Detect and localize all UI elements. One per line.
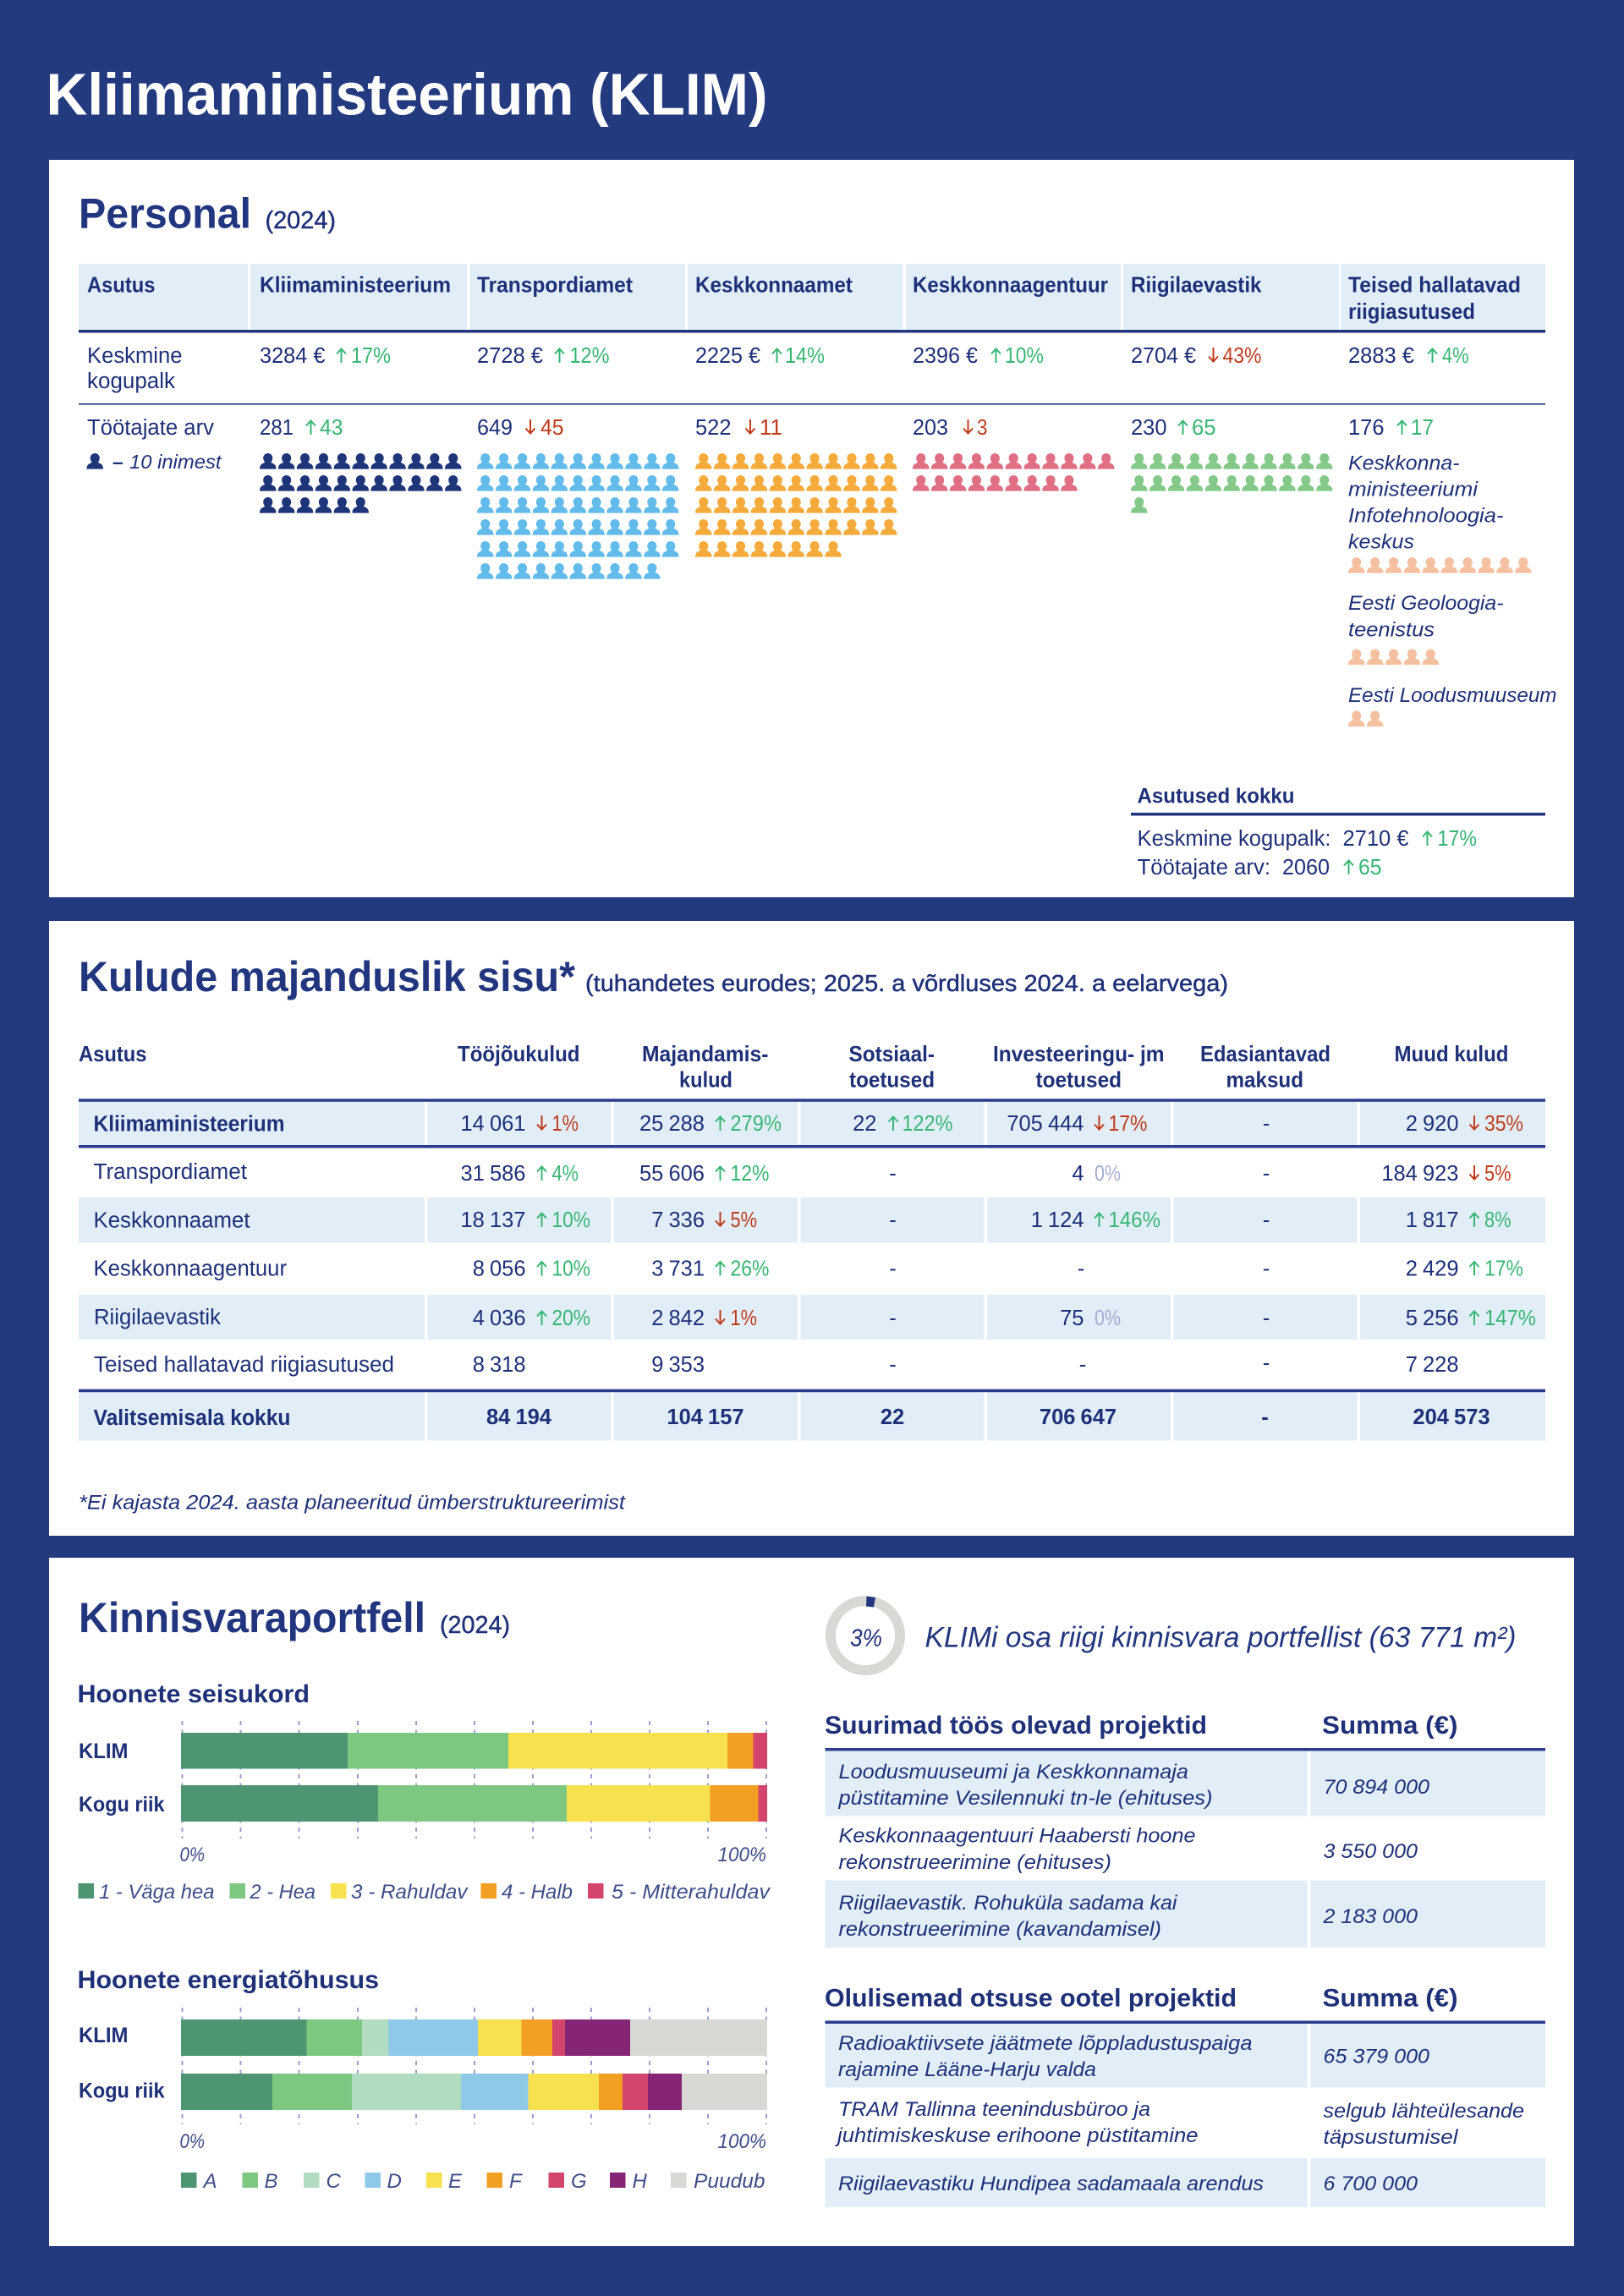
row: Kliimaministeerium: -	[1263, 1112, 1270, 1136]
row: Kliimaministeerium: 1%	[551, 1112, 579, 1136]
legend: energy: C	[326, 2170, 342, 2193]
chart: Hoonete energiatõhusus: 0%	[179, 2130, 205, 2153]
row: Valitsemisala kokku: 204 573	[1413, 1406, 1490, 1429]
sub-agencies list: teenistus	[1348, 619, 1435, 641]
row: staff count	[87, 416, 1434, 440]
table header: staff: Riigilaevastik	[1131, 272, 1262, 298]
row: Keskkonnaagentuur: 8 056	[473, 1257, 526, 1280]
legend: energy: G	[571, 2170, 587, 2193]
chart: Hoonete energiatõhusus: KLIM	[79, 2024, 129, 2047]
table header: costs: Tööjõukulud	[458, 1041, 580, 1066]
table header: staff: Kliimaministeerium	[260, 272, 451, 298]
row: Keskkonnaamet: -	[1263, 1208, 1270, 1232]
table: Suurimad töös olevad projektid: 3 550 000	[1323, 1840, 1418, 1863]
summary: Asutused kokku: Keskmine kogupalk:	[1137, 827, 1331, 851]
table: Olulisemad otsuse ootel projektid: rajamine Lääne-Harju valda	[838, 2058, 1096, 2081]
chart: Hoonete seisukord: Kogu riik	[79, 1793, 165, 1817]
panel: Personal	[49, 160, 1574, 897]
row: Keskkonnaagentuur: 17%	[1484, 1257, 1523, 1280]
row: Kliimaministeerium: Kliimaministeerium	[93, 1113, 284, 1137]
row: Valitsemisala kokku: 22	[881, 1406, 904, 1429]
table: Suurimad töös olevad projektid	[825, 1712, 1545, 1948]
summary: Asutused kokku: 65	[1358, 856, 1382, 879]
table header: costs: Investeeringu- jm	[993, 1041, 1164, 1066]
row: Kliimaministeerium: 279%	[731, 1112, 782, 1136]
row: staff count: 230	[1131, 416, 1167, 440]
row: Riigilaevastik	[94, 1306, 1536, 1330]
row: staff count: 522	[695, 416, 731, 440]
sub-agencies list: Eesti Loodusmuuseum	[1348, 684, 1556, 707]
chart: Hoonete energiatõhusus: Hoonete energiatõhusus	[78, 1966, 379, 1994]
row: average salary: 3284 €	[260, 344, 325, 368]
bar: Kogu riik condition	[181, 1785, 767, 1822]
table: Olulisemad otsuse ootel projektid	[825, 1984, 1545, 2207]
row: staff count: Töötajate arv	[87, 416, 214, 440]
bar: Kogu riik energy	[181, 2074, 767, 2110]
sub-agencies list: Infotehnoloogia-	[1348, 504, 1504, 528]
sub-agencies list: Eesti Geoloogia-	[1348, 592, 1504, 615]
heading: Personal: (2024)	[266, 207, 336, 234]
row: Teised hallatavad riigiasutused: -	[889, 1353, 897, 1377]
row: Transpordiamet: 55 606	[639, 1162, 705, 1186]
panel: Kinnisvaraportfell	[49, 1558, 1574, 2246]
row: Teised hallatavad riigiasutused: 9 353	[651, 1353, 705, 1377]
row: Kliimaministeerium	[93, 1112, 1523, 1137]
row: Teised hallatavad riigiasutused: -	[1079, 1353, 1086, 1377]
legend: condition: 3 - Rahuldav	[351, 1881, 469, 1904]
row: average salary: kogupalk	[87, 370, 175, 393]
summary: Asutused kokku	[1131, 785, 1545, 879]
row: Valitsemisala kokku: Valitsemisala kokku	[93, 1406, 291, 1430]
row: Keskkonnaagentuur: -	[1263, 1257, 1270, 1280]
icon legend: one person equals ten people	[86, 451, 222, 473]
heading: Personal: Personal	[79, 189, 251, 237]
row: Keskkonnaamet: 146%	[1108, 1208, 1160, 1232]
panel: Kulude majanduslik sisu	[49, 921, 1574, 1536]
pictogram: Kliimaministeerium	[260, 453, 462, 513]
row: average salary: 17%	[351, 344, 391, 368]
title: Kliimaministeerium (KLIM)	[46, 61, 768, 127]
row: average salary: 2396 €	[913, 344, 978, 368]
row: average salary: 43%	[1223, 344, 1262, 368]
legend: condition: 4 - Halb	[502, 1881, 573, 1904]
row: Keskkonnaamet: 5%	[731, 1208, 757, 1232]
summary: Asutused kokku: 17%	[1438, 827, 1477, 851]
row: Riigilaevastik: 0%	[1095, 1307, 1121, 1330]
donut: 3 percent share	[831, 1597, 900, 1670]
row: Keskkonnaagentuur: 10%	[551, 1257, 590, 1280]
row: staff count: 281	[260, 416, 294, 440]
heading: Kulude majanduslik sisu	[79, 953, 1228, 1000]
table: Olulisemad otsuse ootel projektid: TRAM Tallinna teenindusbüroo ja	[838, 2098, 1150, 2121]
heading: Personal	[79, 189, 336, 237]
row: staff count: 65	[1192, 416, 1216, 440]
row: Valitsemisala kokku	[93, 1406, 1490, 1430]
sub-agencies list: keskus	[1348, 531, 1414, 553]
table header: costs: kulud	[679, 1067, 732, 1093]
row: Keskkonnaamet: 8%	[1484, 1208, 1511, 1232]
row: Transpordiamet: -	[889, 1162, 897, 1186]
legend: energy: A	[201, 2170, 217, 2193]
row: Riigilaevastik: 75	[1060, 1307, 1084, 1330]
legend: condition: 1 - Väga hea	[99, 1881, 215, 1904]
icon legend: one person equals ten people: 10 inimest	[129, 451, 222, 473]
chart: Hoonete seisukord: 0%	[179, 1844, 205, 1866]
table header: staff: Asutus	[87, 272, 156, 298]
heading: Kinnisvaraportfell: (2024)	[440, 1612, 510, 1639]
table header: costs	[79, 1041, 1509, 1093]
sub-agencies list	[1348, 452, 1556, 726]
row: average salary: 2883 €	[1348, 344, 1414, 368]
row: average salary: 12%	[570, 344, 609, 368]
row: staff count: 176	[1348, 416, 1384, 440]
chart: Hoonete seisukord: Hoonete seisukord	[78, 1680, 310, 1708]
table header: staff: riigiasutused	[1348, 299, 1475, 324]
row: Kliimaministeerium: 122%	[902, 1112, 952, 1136]
table: Suurimad töös olevad projektid: Keskkonnaagentuuri Haabersti hoone	[839, 1825, 1196, 1847]
row: staff count: 649	[477, 416, 513, 440]
summary: Asutused kokku: Töötajate arv:	[1137, 856, 1270, 879]
legend: energy: F	[509, 2170, 523, 2193]
table header: staff: Transpordiamet	[477, 272, 633, 298]
table: Suurimad töös olevad projektid: Summa (€)	[1322, 1712, 1458, 1740]
bar: KLIM energy	[181, 2019, 767, 2056]
table header: costs: Sotsiaal-	[849, 1041, 935, 1066]
row: Keskkonnaagentuur: 3 731	[651, 1257, 705, 1280]
chart: Hoonete seisukord: KLIM	[79, 1740, 129, 1763]
table: Suurimad töös olevad projektid: Riigilaevastik. Rohuküla sadama kai	[839, 1892, 1177, 1915]
pictogram: Riigilaevastik	[1131, 453, 1333, 513]
row: Valitsemisala kokku: -	[1261, 1406, 1269, 1429]
legend: energy: Puudub	[694, 2170, 765, 2193]
table header: costs: Muud kulud	[1394, 1041, 1509, 1066]
table: Olulisemad otsuse ootel projektid: Radioaktiivsete jäätmete lõppladustuspaiga	[838, 2032, 1252, 2055]
row: Transpordiamet: Transpordiamet	[93, 1160, 247, 1184]
legend: condition: 2 - Hea	[250, 1881, 315, 1904]
chart: Hoonete energiatõhusus: 100%	[717, 2130, 766, 2153]
table: Olulisemad otsuse ootel projektid: Riigilaevastiku Hundipea sadamaala arendus	[838, 2173, 1264, 2195]
row: Transpordiamet: 4%	[551, 1162, 579, 1186]
row: Keskkonnaagentuur: -	[889, 1257, 897, 1280]
row: Keskkonnaamet: 10%	[551, 1208, 590, 1232]
sub-agencies list: Keskkonna-	[1348, 452, 1460, 475]
callout: share of state portfolio: KLIMi osa riigi kinnisvara portfellist (63 771 m²)	[925, 1622, 1516, 1654]
row: Teised hallatavad riigiasutused: 8 318	[473, 1353, 526, 1377]
row: Teised hallatavad riigiasutused	[94, 1351, 1458, 1377]
row: Kliimaministeerium: 22	[853, 1112, 876, 1136]
bar: KLIM condition	[181, 1733, 767, 1769]
row: Riigilaevastik: -	[1263, 1307, 1270, 1330]
row: Kliimaministeerium: 17%	[1108, 1112, 1147, 1136]
row: Kliimaministeerium: 705 444	[1007, 1112, 1084, 1136]
row: Keskkonnaagentuur: Keskkonnaagentuur	[93, 1257, 288, 1280]
pictogram: Keskkonnaamet	[695, 453, 897, 557]
row: Teised hallatavad riigiasutused: 7 228	[1406, 1353, 1458, 1377]
table: Suurimad töös olevad projektid: Loodusmuuseumi ja Keskkonnamaja	[839, 1761, 1188, 1784]
table: Suurimad töös olevad projektid: Suurimad töös olevad projektid	[825, 1712, 1207, 1740]
table: Olulisemad otsuse ootel projektid: 65 379 000	[1323, 2045, 1429, 2069]
table header: costs: Edasiantavad	[1200, 1041, 1330, 1066]
summary: Asutused kokku: 2710 €	[1343, 827, 1409, 851]
row: average salary	[87, 344, 1468, 393]
row: Transpordiamet: 0%	[1095, 1162, 1121, 1186]
table: Olulisemad otsuse ootel projektid: Summa (€)	[1323, 1984, 1458, 2013]
row: Riigilaevastik: -	[889, 1307, 897, 1330]
row: Riigilaevastik: 20%	[551, 1307, 590, 1330]
row: Transpordiamet	[93, 1160, 1511, 1186]
chart: Hoonete energiatõhusus: Kogu riik	[79, 2079, 165, 2102]
summary: Asutused kokku: Asutused kokku	[1137, 785, 1294, 808]
legend: energy: D	[387, 2170, 402, 2193]
heading: Kinnisvaraportfell: Kinnisvaraportfell	[79, 1594, 425, 1641]
legend: condition	[78, 1881, 771, 1904]
row: Kliimaministeerium: 35%	[1484, 1112, 1523, 1136]
chart: Hoonete energiatõhusus	[78, 1966, 767, 2193]
table: Suurimad töös olevad projektid: püstitamine Vesilennuki tn-le (ehituses)	[837, 1787, 1213, 1810]
row: Keskkonnaagentuur: 2 429	[1406, 1257, 1458, 1280]
row: Valitsemisala kokku: 104 157	[667, 1406, 744, 1429]
row: Keskkonnaamet: -	[889, 1208, 897, 1232]
table: Suurimad töös olevad projektid: rekonstrueerimine (ehituses)	[839, 1851, 1111, 1874]
row: staff count: 17	[1411, 416, 1434, 440]
row: Kliimaministeerium: 25 288	[639, 1112, 705, 1136]
row: average salary: 2225 €	[695, 344, 760, 368]
row: staff count: 203	[913, 416, 948, 440]
row: Keskkonnaamet: 1 817	[1406, 1208, 1458, 1232]
row: Riigilaevastik: Riigilaevastik	[94, 1306, 221, 1329]
row: Kliimaministeerium: 14 061	[460, 1112, 526, 1136]
row: average salary: 2704 €	[1131, 344, 1196, 368]
table: Olulisemad otsuse ootel projektid: juhtimiskeskuse erihoone püstitamine	[835, 2124, 1198, 2147]
table: Olulisemad otsuse ootel projektid: selgub lähteülesande	[1323, 2100, 1524, 2123]
row: Keskkonnaagentuur: -	[1078, 1257, 1084, 1280]
row: Keskkonnaamet: 7 336	[651, 1208, 705, 1232]
pictogram: Transpordiamet	[477, 453, 678, 579]
legend: energy	[181, 2170, 765, 2193]
row: Teised hallatavad riigiasutused: Teised hallatavad riigiasutused	[94, 1353, 394, 1377]
row: staff count: 11	[760, 416, 782, 440]
table: Suurimad töös olevad projektid: 2 183 000	[1322, 1905, 1418, 1928]
chart: Hoonete seisukord: 100%	[717, 1844, 766, 1866]
table header: costs: maksud	[1226, 1067, 1303, 1093]
row: staff count: 45	[540, 416, 563, 440]
row: Keskkonnaamet: 18 137	[460, 1208, 526, 1232]
row: Keskkonnaagentuur	[93, 1257, 1523, 1280]
heading: Kulude majanduslik sisu: Kulude majanduslik sisu*	[79, 953, 576, 1000]
summary: Asutused kokku: 2060	[1282, 856, 1330, 879]
row: Riigilaevastik: 5 256	[1406, 1307, 1458, 1330]
row: average salary: 4%	[1442, 344, 1468, 368]
row: staff count: 43	[320, 416, 343, 440]
icon legend: one person equals ten people: –	[112, 451, 123, 473]
table header: costs: toetused	[1035, 1067, 1122, 1093]
table bands	[79, 1099, 1545, 1441]
row: Transpordiamet: 12%	[731, 1162, 770, 1186]
legend: condition: 5 - Mitterahuldav	[612, 1881, 771, 1904]
footnote: *Ei kajasta 2024. aasta planeeritud ümberstruktureerimist	[79, 1492, 626, 1514]
table header: costs: Majandamis-	[642, 1041, 768, 1066]
row: Valitsemisala kokku: 706 647	[1040, 1406, 1116, 1429]
row: Keskkonnaamet: Keskkonnaamet	[93, 1209, 250, 1233]
row: Riigilaevastik: 4 036	[473, 1307, 526, 1330]
table header: staff: Keskkonnaagentuur	[913, 272, 1108, 298]
row: Riigilaevastik: 147%	[1484, 1307, 1536, 1330]
table header: costs: toetused	[849, 1067, 935, 1093]
table: Olulisemad otsuse ootel projektid: Olulisemad otsuse ootel projektid	[825, 1984, 1237, 2013]
table header: costs: Asutus	[79, 1041, 147, 1066]
legend: energy: E	[448, 2170, 463, 2193]
legend: energy: B	[264, 2170, 278, 2193]
table: Suurimad töös olevad projektid: rekonstrueerimine (kavandamisel)	[839, 1918, 1161, 1941]
table header: staff: Teised hallatavad	[1348, 272, 1521, 298]
row: Kliimaministeerium: 2 920	[1406, 1112, 1458, 1136]
row: Transpordiamet: 31 586	[460, 1162, 526, 1186]
row: Valitsemisala kokku: 84 194	[486, 1406, 552, 1429]
row: average salary: Keskmine	[87, 344, 183, 368]
chart: Hoonete seisukord	[78, 1680, 771, 1904]
row: average salary: 2728 €	[477, 344, 543, 368]
row: Keskkonnaagentuur: 26%	[731, 1257, 770, 1280]
row: staff count: 3	[977, 416, 988, 440]
row: Transpordiamet: 5%	[1484, 1162, 1511, 1186]
row: average salary: 10%	[1005, 344, 1044, 368]
row: Teised hallatavad riigiasutused: -	[1263, 1351, 1270, 1375]
table: Olulisemad otsuse ootel projektid: täpsustumisel	[1323, 2126, 1458, 2149]
row: Transpordiamet: -	[1263, 1162, 1270, 1186]
row: Riigilaevastik: 2 842	[651, 1307, 705, 1330]
row: Riigilaevastik: 1%	[731, 1307, 757, 1330]
table: Suurimad töös olevad projektid: 70 894 000	[1323, 1776, 1429, 1799]
legend: energy: H	[633, 2170, 648, 2193]
row: Transpordiamet: 184 923	[1381, 1162, 1458, 1186]
table: Olulisemad otsuse ootel projektid: 6 700 000	[1323, 2173, 1418, 2195]
donut: 3 percent share: 3%	[850, 1625, 882, 1652]
table header: staff	[79, 264, 1545, 333]
table header: staff: Keskkonnaamet	[695, 272, 853, 298]
row: Transpordiamet: 4	[1072, 1162, 1084, 1186]
row: average salary: 14%	[785, 344, 825, 368]
pictogram: Keskkonnaagentuur	[913, 453, 1115, 491]
heading: Kulude majanduslik sisu: (tuhandetes eurodes; 2025. a võrdluses 2024. a eelarvega)	[585, 970, 1228, 996]
sub-agencies list: ministeeriumi	[1348, 479, 1479, 501]
row: Keskkonnaamet	[93, 1208, 1511, 1233]
row: Keskkonnaamet: 1 124	[1031, 1208, 1084, 1232]
